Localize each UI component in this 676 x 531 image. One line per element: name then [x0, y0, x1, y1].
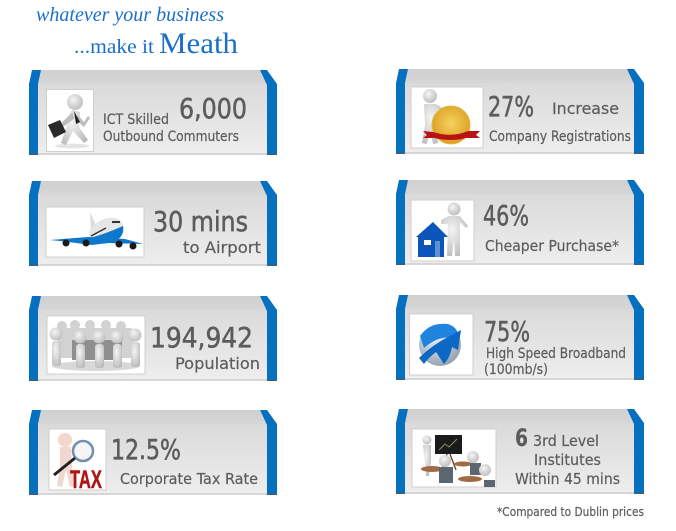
- panel: ICT skilled commuters: Outbound Commuters: [103, 129, 239, 145]
- panel: third level institutes: Within 45 mins: [515, 470, 620, 488]
- icon: airplane: [46, 207, 144, 257]
- panel: broadband: 75%: [484, 315, 530, 348]
- panel: third level institutes: Institutes: [534, 451, 601, 469]
- panel: company registrations: Company Registrations: [489, 129, 631, 145]
- title: Meath: [159, 27, 238, 60]
- title: whatever your business: [36, 4, 224, 26]
- panel: corporate tax: [29, 410, 277, 495]
- panel: company registrations: [396, 69, 644, 154]
- footnote: *Compared to Dublin prices: [497, 505, 644, 519]
- panel: cheaper purchase: [396, 180, 644, 265]
- panel: airport: to Airport: [183, 238, 261, 257]
- icon: crowd of figures: [47, 316, 145, 374]
- panel: broadband: [396, 295, 644, 380]
- icon: tax magnifier: [49, 429, 106, 494]
- panel: third level institutes: 6: [515, 424, 528, 452]
- panel: population: Population: [175, 354, 260, 373]
- icon: figure with gold seal: [411, 87, 483, 148]
- panel: cheaper purchase: Cheaper Purchase*: [485, 237, 619, 255]
- panel: cheaper purchase: 46%: [483, 199, 529, 232]
- panel: third level institutes: 3rd Level: [533, 432, 599, 450]
- icon: figure with blue house: [411, 200, 474, 261]
- panel: third level institutes: [396, 409, 644, 494]
- panel: airport: [29, 181, 277, 266]
- panel: ICT skilled commuters: 6,000: [179, 92, 247, 125]
- panel: ICT skilled commuters: [29, 70, 277, 155]
- panel: population: [29, 296, 277, 381]
- panel: ICT skilled commuters: ICT Skilled: [103, 112, 169, 128]
- panel: broadband: (100mb/s): [484, 362, 548, 378]
- panel: company registrations: Increase: [552, 99, 619, 118]
- panel: broadband: High Speed Broadband: [486, 346, 626, 362]
- icon: running figure with briefcase: [46, 90, 94, 152]
- icon: tax magnifier: TAX: [70, 466, 102, 494]
- title: ...make it: [74, 36, 154, 58]
- panel: airport: 30 mins: [153, 205, 248, 238]
- panel: corporate tax: 12.5%: [111, 433, 181, 466]
- panel: company registrations: 27%: [488, 90, 534, 123]
- icon: classroom scene: [412, 429, 496, 487]
- title: [36, 4, 238, 60]
- panel: corporate tax: Corporate Tax Rate: [120, 470, 258, 488]
- icon: globe with arrow: [410, 314, 473, 375]
- panel: population: 194,942: [150, 321, 253, 354]
